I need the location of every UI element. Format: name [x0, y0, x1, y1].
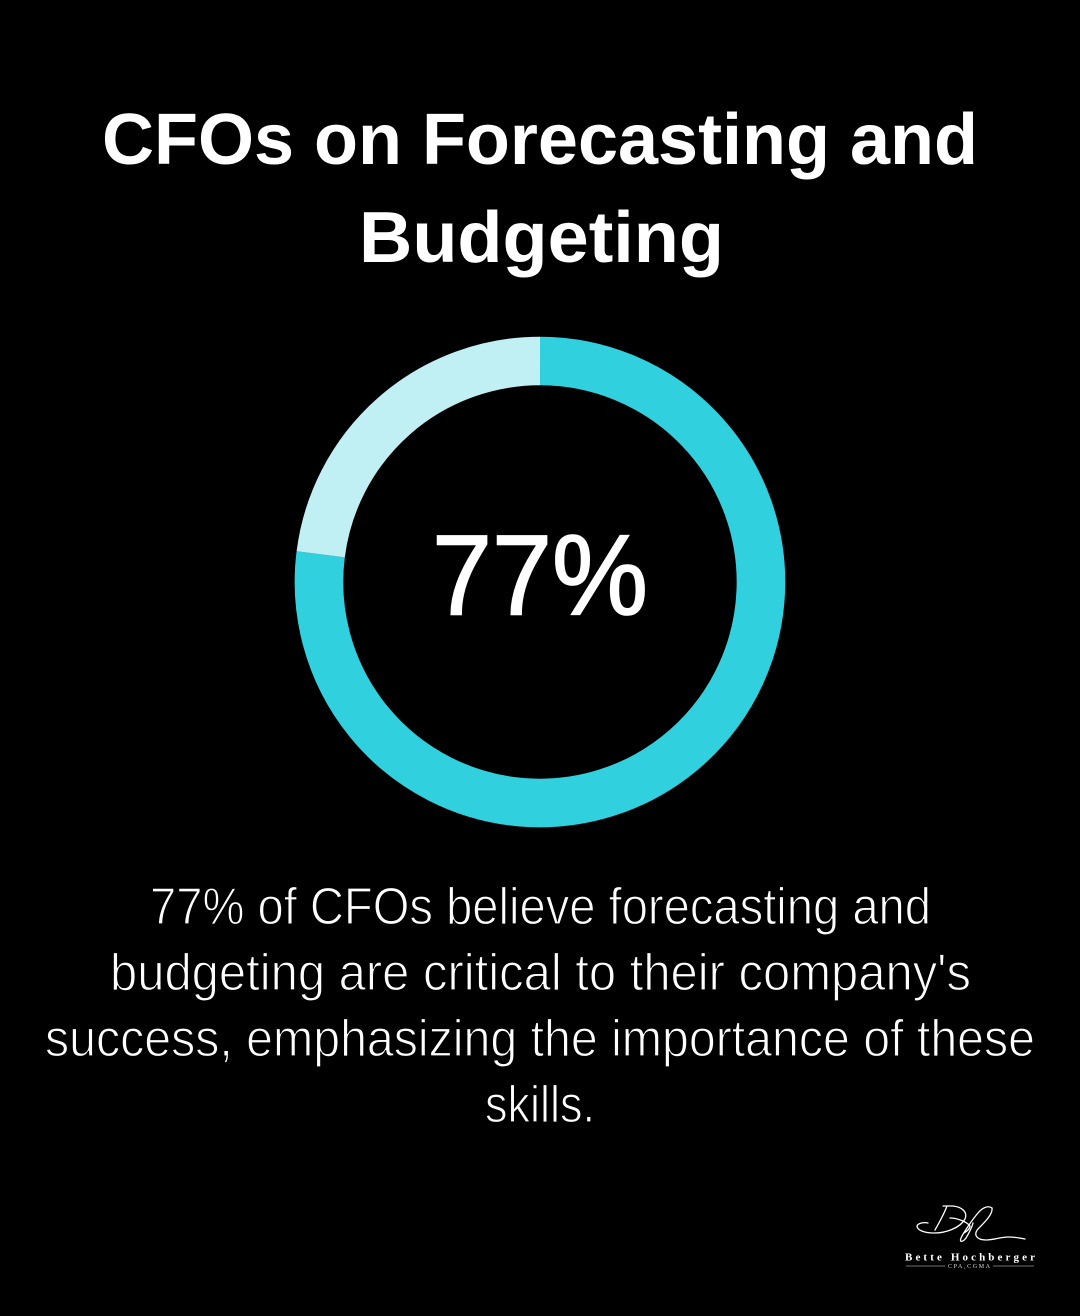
description text: skills.: [485, 1076, 595, 1134]
title: Budgeting: [359, 198, 724, 278]
donut chart: 77 percent: [319, 361, 761, 803]
logo name: Bette Hochberger: [905, 1252, 1035, 1264]
donut segment: remaining 23 percent: [321, 361, 540, 554]
logo rules: [906, 1265, 1034, 1267]
description text: [45, 878, 1035, 1134]
title: CFOs on Forecasting and: [102, 100, 978, 180]
logo credentials: CPA,CGMA: [948, 1264, 991, 1270]
icon: BH signature: [917, 1206, 1025, 1241]
description text: budgeting are critical to their company's: [110, 944, 971, 1002]
description text: success, emphasizing the importance of these: [45, 1010, 1035, 1068]
donut centre value: 77%: [432, 512, 648, 640]
logo: Bette Hochberger: [905, 1206, 1035, 1270]
title: [102, 100, 978, 278]
donut segment: 77 percent share: [319, 361, 761, 803]
description text: 77% of CFOs believe forecasting and: [150, 878, 931, 936]
